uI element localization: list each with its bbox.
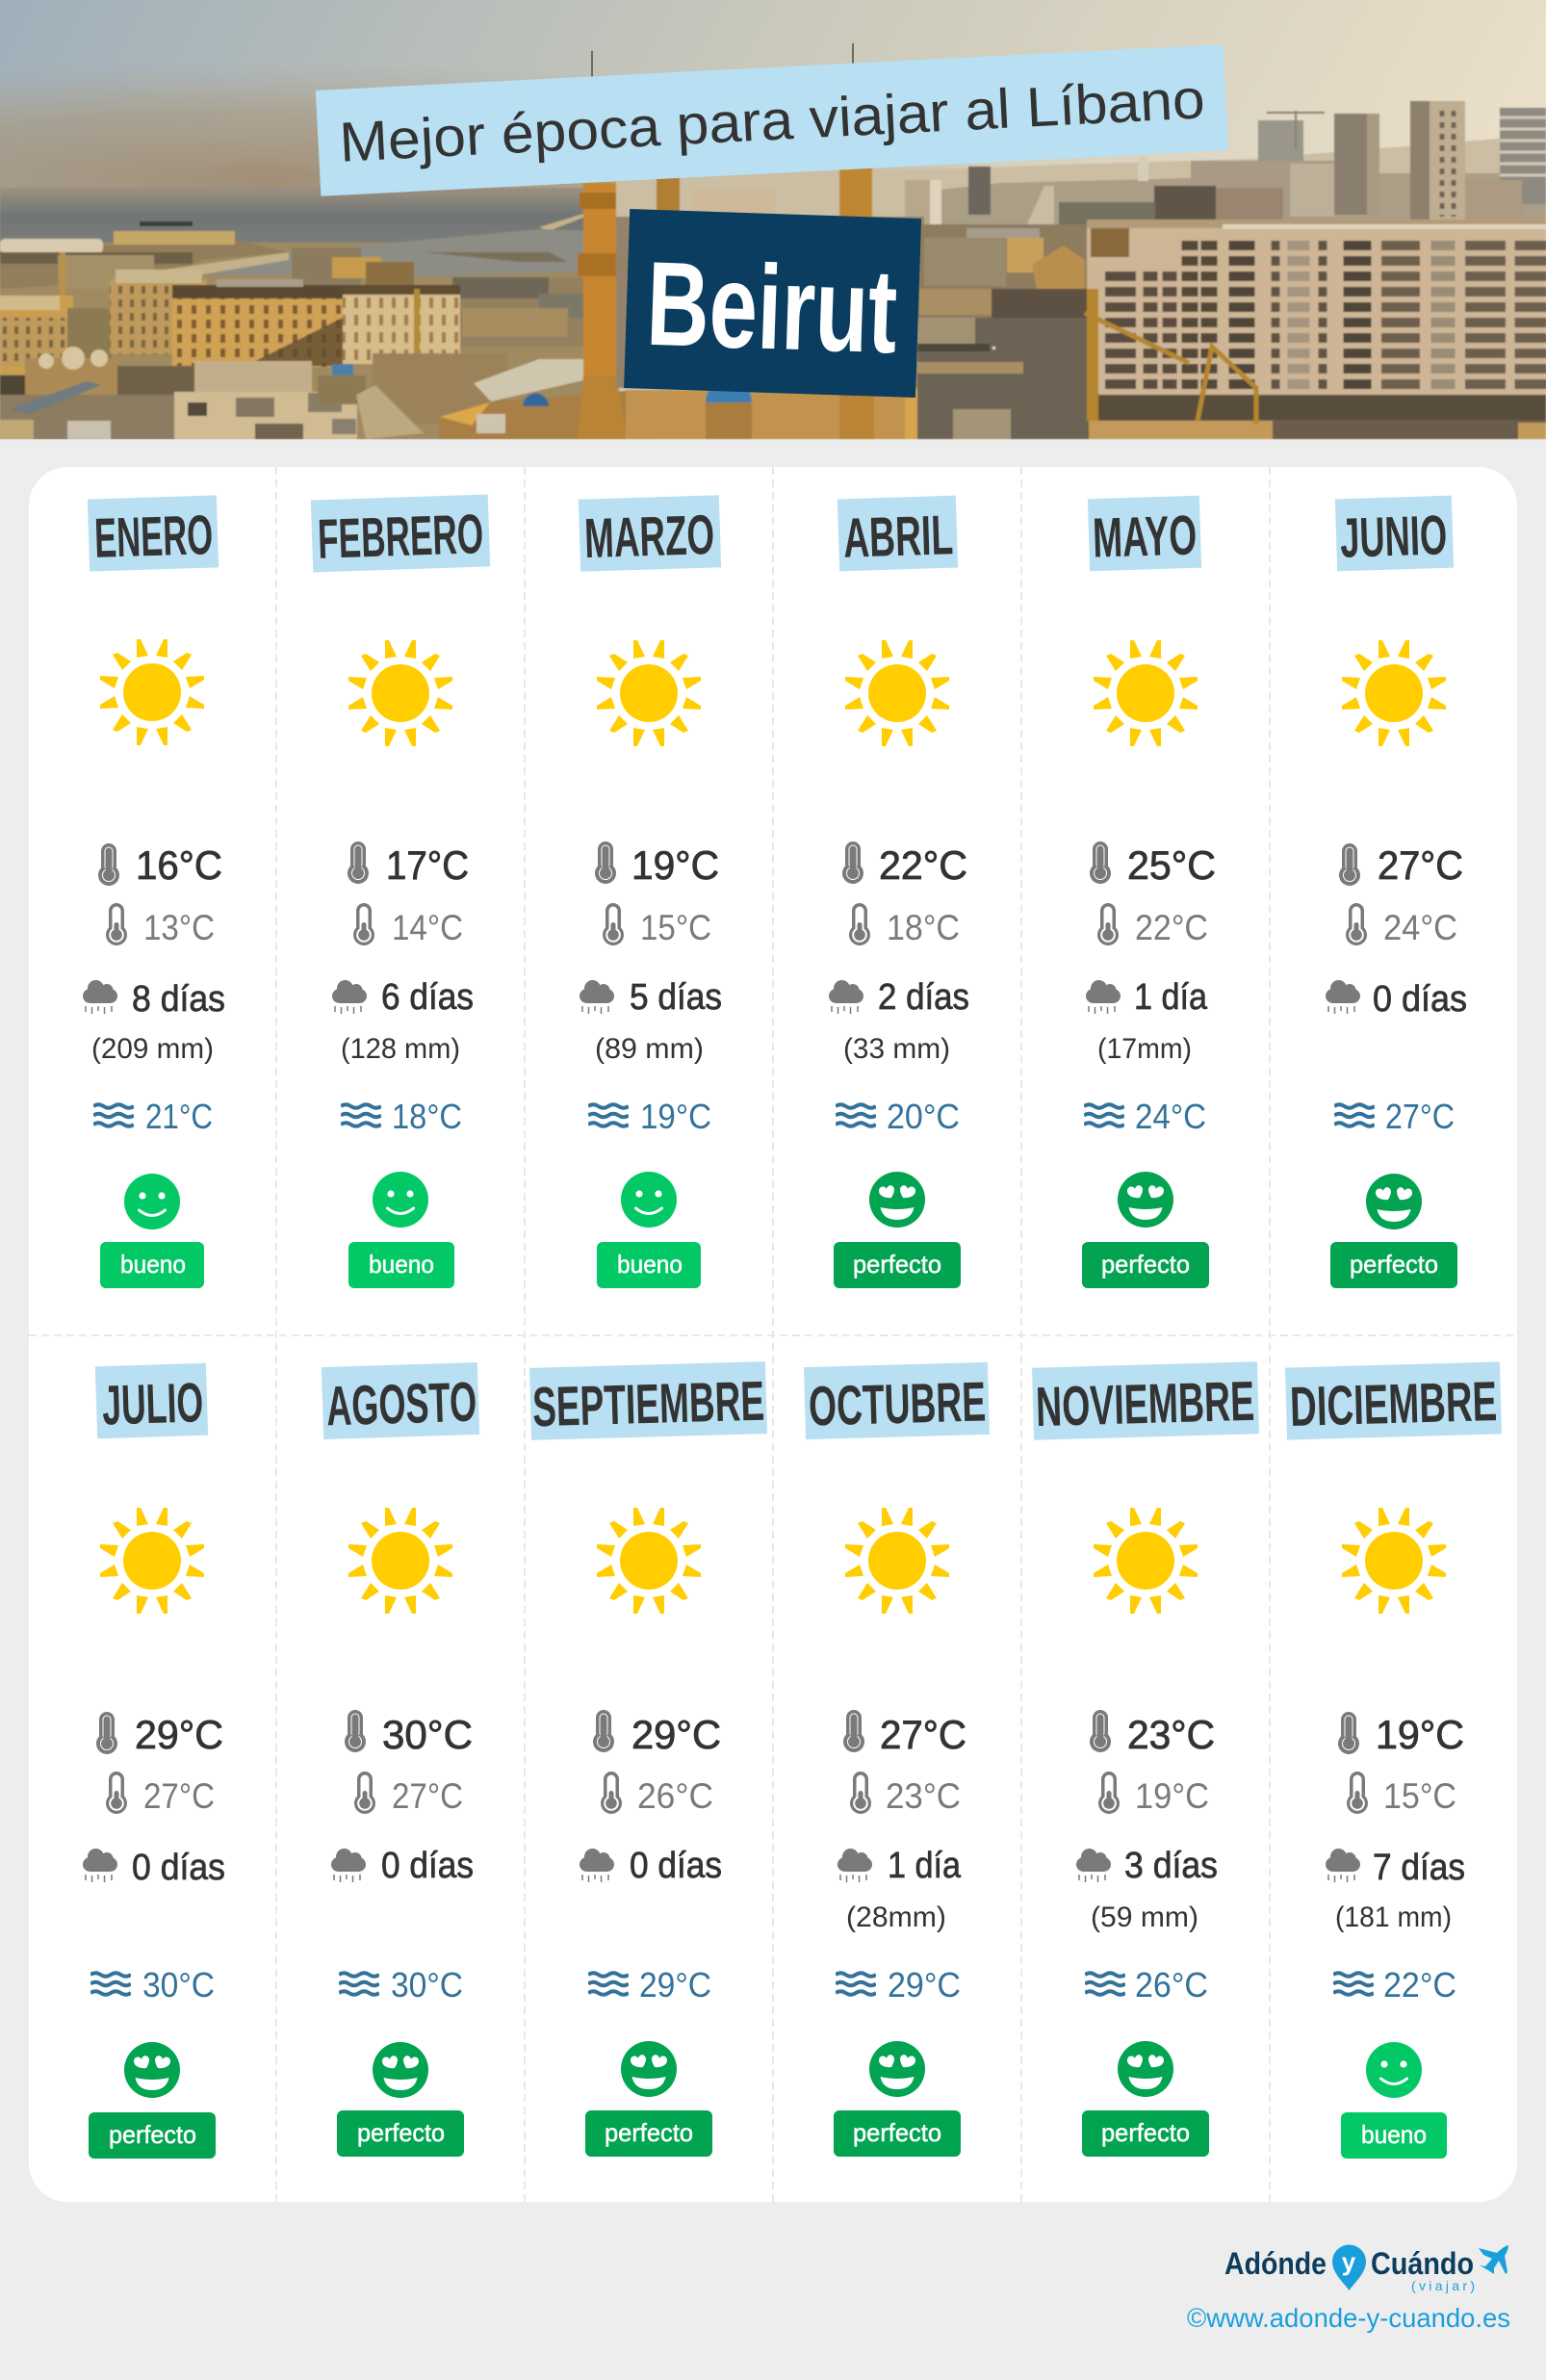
icon: sun	[100, 1508, 204, 1614]
rating face	[1366, 1174, 1422, 1229]
low temperature	[1098, 1772, 1209, 1816]
sea temperature: 19°C	[640, 1097, 711, 1136]
sea temperature: 21°C	[145, 1097, 213, 1136]
high temperature	[593, 1710, 721, 1757]
high temperature: 17°C	[386, 842, 469, 888]
logo: Adónde y Cuándo	[1224, 2245, 1508, 2293]
website credit: ©www.adonde-y-cuando.es	[1187, 2303, 1510, 2333]
rainfall: (28mm)	[846, 1901, 946, 1933]
rain days	[837, 1846, 962, 1886]
sea temperature: 18°C	[392, 1097, 462, 1136]
rating face	[1118, 1172, 1173, 1228]
panel: enero	[83, 495, 225, 1288]
low temperature	[850, 1772, 961, 1816]
rain days: 0 días	[1373, 979, 1467, 1020]
rating pill: perfecto	[1350, 1250, 1438, 1279]
sea temperature: 26°C	[1135, 1965, 1208, 2005]
sea temperature: 30°C	[391, 1965, 463, 2005]
rain days	[829, 977, 969, 1018]
panel: septiembre	[529, 1361, 767, 2157]
low temperature	[1347, 1772, 1456, 1816]
rainfall: (17mm)	[1097, 1033, 1192, 1065]
panel: agosto	[322, 1362, 479, 2157]
rating pill	[585, 2110, 712, 2157]
rating pill	[100, 1242, 204, 1288]
sea temperature	[1085, 1965, 1208, 2005]
rain days	[580, 977, 722, 1018]
low temperature	[603, 903, 711, 947]
icon: map pin with y	[1332, 2245, 1366, 2290]
sea temperature: 24°C	[1135, 1097, 1206, 1136]
rating face	[124, 2042, 180, 2098]
month label: AGOSTO	[325, 1371, 477, 1437]
panel: julio	[83, 1363, 225, 2159]
low temperature	[354, 1772, 463, 1816]
rainfall: (89 mm)	[595, 1033, 704, 1065]
sea temperature	[93, 1097, 213, 1136]
panel: marzo	[579, 495, 722, 1288]
icon: sun	[1094, 640, 1198, 746]
rain days: 0 días	[381, 1846, 474, 1886]
low temperature	[106, 903, 215, 947]
sea temperature	[1333, 1965, 1456, 2005]
rating face	[869, 1172, 925, 1228]
panel: climate table card	[29, 467, 1517, 2202]
low temperature: 15°C	[640, 908, 711, 947]
rainfall: (128 mm)	[341, 1033, 460, 1065]
high temperature: 30°C	[382, 1712, 473, 1757]
rating pill	[348, 1242, 454, 1288]
low temperature	[353, 903, 463, 947]
rain days	[1326, 1848, 1465, 1888]
rain days: 7 días	[1373, 1848, 1465, 1888]
high temperature	[1338, 1712, 1464, 1757]
rain days	[83, 979, 225, 1020]
low temperature: 26°C	[637, 1776, 713, 1816]
sea temperature	[588, 1965, 711, 2005]
rainfall: (209 mm)	[91, 1033, 214, 1065]
rating pill	[597, 1242, 701, 1288]
rating pill: bueno	[369, 1250, 434, 1279]
month label	[88, 495, 219, 572]
logo tagline: (viajar)	[1411, 2278, 1475, 2293]
panel: noviembre	[1032, 1361, 1259, 2157]
rating pill: perfecto	[605, 2118, 693, 2147]
high temperature	[348, 841, 469, 888]
rain days	[83, 1848, 225, 1888]
rain days: 0 días	[132, 1848, 225, 1888]
rating pill: perfecto	[1101, 2118, 1190, 2147]
panel: mayo	[1082, 496, 1216, 1288]
sea temperature: 29°C	[888, 1965, 961, 2005]
rating pill	[1082, 1242, 1209, 1288]
low temperature	[601, 1772, 713, 1816]
month label: MARZO	[583, 504, 715, 570]
sea temperature: 29°C	[639, 1965, 711, 2005]
sea temperature	[1334, 1097, 1455, 1136]
high temperature	[96, 1712, 223, 1757]
sea temperature	[1084, 1097, 1206, 1136]
icon: sun	[597, 640, 701, 746]
rating face	[869, 2041, 925, 2097]
rating face	[621, 2041, 677, 2097]
rain days: 1 día	[888, 1846, 962, 1886]
rating face	[373, 2042, 428, 2098]
high temperature	[345, 1710, 473, 1757]
icon: sun	[597, 1508, 701, 1614]
month label	[322, 1362, 479, 1439]
sea temperature: 20°C	[887, 1097, 960, 1136]
low temperature: 14°C	[392, 908, 463, 947]
high temperature: 23°C	[1127, 1712, 1215, 1757]
rating pill: perfecto	[357, 2118, 445, 2147]
low temperature: 13°C	[143, 908, 215, 947]
rain days	[1326, 979, 1467, 1020]
sea temperature	[836, 1965, 961, 2005]
rain days: 8 días	[132, 979, 225, 1020]
high temperature	[1090, 1710, 1215, 1757]
month label: OCTUBRE	[808, 1370, 987, 1438]
rain days: 2 días	[878, 977, 969, 1018]
logo word: Cuándo: Cuándo	[1371, 2246, 1474, 2281]
sea temperature: 27°C	[1385, 1097, 1455, 1136]
icon: plane	[1479, 2245, 1508, 2274]
rating pill: perfecto	[853, 1250, 941, 1279]
rain days: 1 día	[1134, 977, 1208, 1018]
month label: JULIO	[101, 1371, 204, 1437]
month label: MAYO	[1092, 504, 1198, 570]
month label: ENERO	[93, 504, 214, 570]
rating face	[124, 1174, 180, 1229]
rating pill	[1341, 2112, 1447, 2159]
rain days: 6 días	[381, 977, 474, 1018]
panel: febrero	[311, 494, 490, 1288]
rating pill: perfecto	[1101, 1250, 1190, 1279]
month label	[579, 495, 721, 572]
low temperature: 27°C	[392, 1776, 463, 1816]
rating pill: bueno	[1361, 2120, 1427, 2149]
high temperature: 29°C	[631, 1712, 721, 1757]
high temperature	[842, 841, 967, 888]
high temperature	[1339, 842, 1463, 888]
city name box: Beirut	[624, 209, 921, 398]
month label	[804, 1362, 990, 1439]
low temperature: 15°C	[1383, 1776, 1456, 1816]
high temperature: 16°C	[136, 842, 222, 888]
low temperature: 22°C	[1135, 908, 1208, 947]
sea temperature	[90, 1965, 215, 2005]
month label: FEBRERO	[317, 503, 484, 571]
rating pill: bueno	[617, 1250, 683, 1279]
month label	[837, 496, 958, 571]
low temperature	[849, 903, 960, 947]
low temperature: 27°C	[143, 1776, 215, 1816]
high temperature	[595, 841, 719, 888]
icon: sun	[1094, 1508, 1198, 1614]
panel: junio	[1326, 496, 1467, 1288]
month label: NOVIEMBRE	[1035, 1370, 1255, 1438]
rainfall: (33 mm)	[843, 1033, 950, 1065]
rain days	[331, 1846, 474, 1886]
rating pill	[1082, 2110, 1209, 2157]
rainfall: (59 mm)	[1091, 1901, 1198, 1933]
high temperature	[843, 1710, 966, 1757]
high temperature: 25°C	[1127, 842, 1216, 888]
sea temperature: 30°C	[142, 1965, 215, 2005]
rating pill: perfecto	[853, 2118, 941, 2147]
city name text: Beirut	[645, 238, 899, 378]
sea temperature: 22°C	[1383, 1965, 1456, 2005]
low temperature: 18°C	[887, 908, 960, 947]
header photo: Beirut skyline	[0, 0, 1546, 439]
rating pill	[89, 2112, 216, 2159]
sea temperature	[588, 1097, 711, 1136]
rating pill	[834, 1242, 961, 1288]
high temperature: 27°C	[1378, 842, 1463, 888]
icon: sun	[845, 640, 949, 746]
rating face	[1118, 2041, 1173, 2097]
sea temperature	[341, 1097, 462, 1136]
low temperature: 19°C	[1135, 1776, 1209, 1816]
rating pill	[1330, 1242, 1457, 1288]
rainfall: (181 mm)	[1335, 1901, 1452, 1933]
low temperature	[106, 1772, 215, 1816]
rain days	[580, 1846, 722, 1886]
rating pill: perfecto	[109, 2120, 196, 2149]
icon: map pin with y: y	[1342, 2247, 1356, 2276]
month label	[1335, 496, 1454, 571]
sea temperature	[836, 1097, 960, 1136]
rating face	[373, 1172, 428, 1228]
logo word: Adónde: Adónde	[1224, 2246, 1327, 2281]
rain days: 5 días	[630, 977, 722, 1018]
high temperature	[98, 842, 222, 888]
rain days: 3 días	[1124, 1846, 1218, 1886]
title text: Mejor época para viajar al Líbano	[338, 67, 1206, 174]
month label	[95, 1363, 208, 1438]
month label	[529, 1361, 767, 1440]
panel: diciembre	[1285, 1361, 1502, 2159]
rating face	[621, 1172, 677, 1228]
rating pill	[834, 2110, 961, 2157]
rain days	[332, 977, 474, 1018]
month label: JUNIO	[1339, 504, 1448, 570]
rain days	[1076, 1846, 1218, 1886]
title banner	[316, 44, 1228, 196]
icon: sun	[348, 640, 452, 746]
low temperature	[1097, 903, 1208, 947]
rating pill	[337, 2110, 464, 2157]
icon: sun	[845, 1508, 949, 1614]
high temperature: 27°C	[880, 1712, 966, 1757]
month label	[1088, 496, 1201, 571]
sea temperature	[339, 1965, 463, 2005]
icon: sun	[1342, 640, 1446, 746]
icon: sun	[348, 1508, 452, 1614]
icon: sun	[100, 639, 204, 745]
panel: octubre	[804, 1362, 990, 2157]
low temperature	[1346, 903, 1457, 947]
month label: SEPTIEMBRE	[531, 1370, 765, 1438]
low temperature: 23°C	[886, 1776, 961, 1816]
month label: ABRIL	[842, 504, 954, 570]
month label	[1032, 1361, 1259, 1440]
high temperature: 29°C	[135, 1712, 223, 1757]
low temperature: 24°C	[1383, 908, 1457, 947]
rain days: 0 días	[630, 1846, 722, 1886]
icon: sun	[1342, 1508, 1446, 1614]
month label	[311, 494, 490, 573]
high temperature	[1090, 841, 1216, 888]
high temperature: 19°C	[631, 842, 719, 888]
panel: abril	[829, 496, 969, 1288]
rain days	[1086, 977, 1208, 1018]
rating pill: bueno	[120, 1250, 186, 1279]
rating face	[1366, 2042, 1422, 2098]
high temperature: 19°C	[1376, 1712, 1464, 1757]
high temperature: 22°C	[879, 842, 967, 888]
